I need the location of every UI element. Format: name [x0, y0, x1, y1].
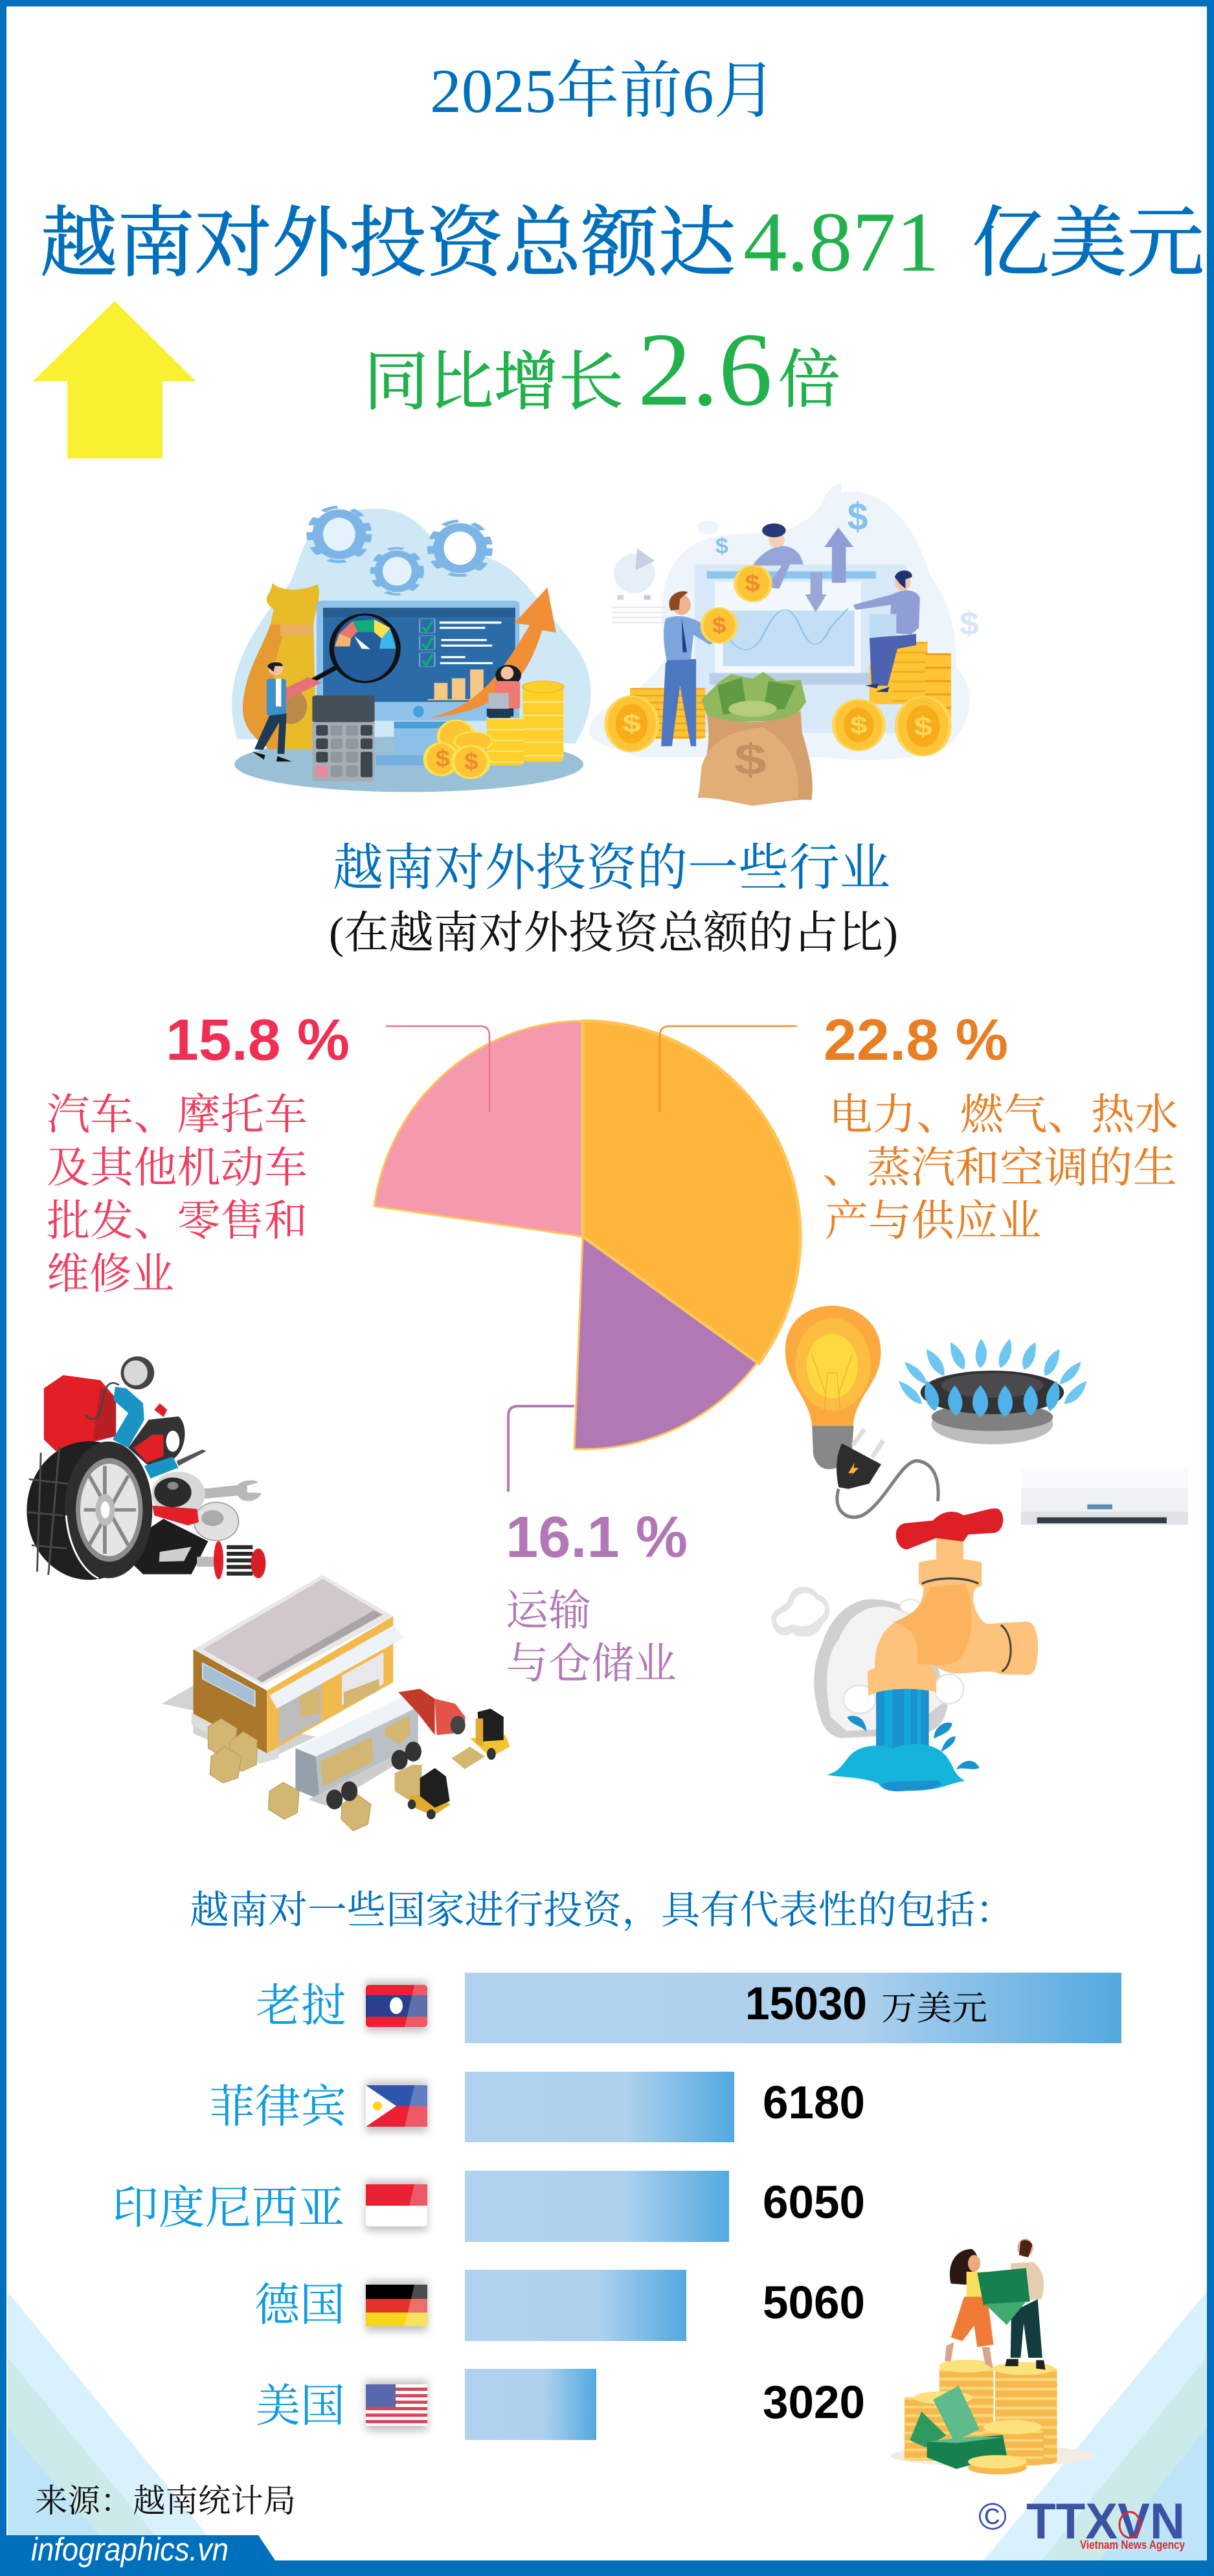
- callout line: 15.8%: [386, 1026, 489, 1112]
- shadow: [162, 1686, 316, 1763]
- value: 5060: [763, 2278, 865, 2329]
- bar: [465, 2171, 729, 2242]
- water stream: [827, 1685, 980, 1791]
- truck cab: [398, 1689, 466, 1735]
- person: left investor: $: [712, 613, 726, 638]
- description: [506, 1587, 677, 1688]
- monitor: [317, 601, 519, 765]
- bar chart: [112, 1973, 1121, 2440]
- tap handle: [896, 1508, 1003, 1549]
- description: [822, 1092, 1178, 1245]
- large coins: $: [914, 711, 932, 741]
- forklift front: [395, 1765, 451, 1819]
- wall base: [192, 1713, 278, 1764]
- battery: [132, 1519, 208, 1574]
- globe: [1119, 2512, 1140, 2538]
- value: 15030: [745, 1978, 867, 2030]
- person: man with magnifier: [253, 662, 292, 761]
- up and down arrows: [805, 528, 853, 612]
- large coins: $: [623, 709, 641, 737]
- title text blue: 越南对外投资总额达: [40, 201, 736, 286]
- decoration: bottom left light rays: [8, 2292, 208, 2535]
- small coins: [968, 2455, 1027, 2474]
- growth text: 同比增长: [364, 346, 624, 418]
- growth value 2.6: 2.6: [638, 312, 772, 428]
- copyright mark: ©: [978, 2496, 1007, 2538]
- country name: 印度尼西亚: [112, 2184, 344, 2234]
- gears: [309, 507, 489, 594]
- dollar signs: [715, 496, 979, 642]
- coin stacks: $: [436, 746, 450, 772]
- person: top investor: [736, 524, 804, 601]
- forklift right: [451, 1708, 510, 1769]
- title: total investment: [40, 194, 1204, 289]
- flag: Germany: [366, 2281, 427, 2331]
- green money held: [977, 2268, 1030, 2325]
- red caliper: [152, 1506, 199, 1525]
- bar: [465, 1973, 1121, 2043]
- checklist: [420, 619, 501, 667]
- description: 产与供应业: [825, 1198, 1041, 1245]
- steam clouds: [771, 1587, 963, 1738]
- row: Germany: [254, 2270, 865, 2341]
- person: man: [1005, 2239, 1046, 2369]
- description: 运输: [506, 1587, 591, 1635]
- left wall: [193, 1649, 267, 1753]
- brake disc: [152, 1472, 205, 1516]
- windows: [203, 1663, 255, 1707]
- gas burner: [899, 1339, 1086, 1444]
- ground shadow: [890, 2445, 1095, 2467]
- label: 22.8% utilities: [822, 1008, 1178, 1245]
- row: Indonesia: [112, 2171, 865, 2242]
- row: United States: [256, 2369, 865, 2440]
- label: 15.8% motor vehicles: [47, 1008, 350, 1298]
- coin stacks: [630, 642, 951, 739]
- slice: motor vehicles 15.8%: [374, 1021, 583, 1237]
- dollar signs: $: [715, 533, 728, 558]
- agency name: Vietnam News Agency: [1080, 2538, 1185, 2551]
- country name: 菲律宾: [209, 2083, 346, 2133]
- orange growth arrow: [428, 587, 556, 718]
- boxes left: [208, 1719, 371, 1831]
- growth unit: 倍: [778, 346, 840, 416]
- gauge: [121, 1356, 154, 1389]
- description: 及其他机动车: [47, 1145, 308, 1192]
- icon: yellow up arrow: [33, 301, 196, 458]
- banknotes: [910, 2386, 1007, 2469]
- footer tab: [0, 2535, 275, 2576]
- growth line: [364, 312, 840, 428]
- front wall: [267, 1616, 393, 1753]
- screen: [695, 565, 906, 733]
- background pie and lines: [612, 484, 842, 623]
- light bulb: [785, 1306, 881, 1469]
- money bag with banknotes: [698, 672, 813, 806]
- description: 维修业: [47, 1251, 174, 1298]
- wrench: [201, 1480, 262, 1501]
- country name: 美国: [256, 2382, 345, 2432]
- description: 与仓储业: [506, 1641, 677, 1688]
- description: 批发、零售和: [47, 1198, 308, 1245]
- country name: 德国: [254, 2281, 345, 2331]
- flag: United States: [366, 2380, 427, 2431]
- illustration: couple on coins: [890, 2239, 1095, 2474]
- person: top investor: $: [745, 570, 760, 596]
- value: 15.8 %: [166, 1008, 350, 1073]
- section heading: countries: 越南对一些国家进行投资，具有代表性的包括：: [190, 1889, 1015, 1932]
- flag: Philippines: [366, 2081, 427, 2132]
- slice: utilities 22.8%: [583, 1021, 800, 1363]
- illustration: analytics dashboard: [232, 507, 591, 792]
- money bag: [243, 583, 319, 749]
- person: right investor: [853, 570, 920, 692]
- small bars: [428, 669, 489, 700]
- shock absorber: [197, 1557, 219, 1567]
- illustration: warehouse and truck: [162, 1575, 510, 1831]
- motorcycle fender: [128, 1417, 185, 1466]
- country name: 老挝: [256, 1982, 346, 2032]
- flag: Indonesia: [366, 2180, 427, 2231]
- slice: transport 16.1%: [574, 1237, 758, 1449]
- person: woman: [945, 2249, 993, 2369]
- unit: 万美元: [881, 1991, 987, 2028]
- pie chart: [374, 1021, 800, 1449]
- wordmark: TTXVN: [1026, 2492, 1185, 2549]
- description: 、蒸汽和空调的生: [822, 1145, 1177, 1192]
- row: Philippines: [209, 2072, 865, 2142]
- bar: [465, 2270, 686, 2341]
- logo: TTXVN: [978, 2492, 1185, 2551]
- bearing: [194, 1502, 239, 1541]
- large coins: $: [850, 711, 868, 739]
- description: [47, 1092, 308, 1298]
- water tap: [868, 1538, 1038, 1696]
- money bag with banknotes: $: [734, 735, 767, 784]
- value: 3020: [763, 2377, 865, 2428]
- large coins: [606, 696, 950, 756]
- screwdriver: [144, 1457, 179, 1479]
- decoration: bottom right light rays: [984, 2292, 1206, 2560]
- trailer: [295, 1694, 422, 1809]
- coin stacks: [425, 681, 563, 778]
- coin stacks: [905, 2360, 1057, 2465]
- coin stacks: $: [464, 748, 478, 774]
- tire: [27, 1441, 152, 1580]
- blue pump tool: [113, 1387, 144, 1448]
- bar: [465, 2369, 596, 2440]
- illustration: investors and coins: [589, 484, 979, 806]
- plug and cable: [837, 1429, 938, 1518]
- description: 电力、燃气、热水: [829, 1092, 1178, 1139]
- source note: 来源：越南统计局: [35, 2483, 296, 2519]
- value: 6050: [763, 2177, 865, 2228]
- callout line: 22.8%: [660, 1026, 797, 1112]
- value: 6180: [763, 2078, 865, 2129]
- unit text: 亿美元: [972, 201, 1204, 286]
- label: 16.1% transport: [506, 1505, 688, 1688]
- section subheading: share note: (在越南对外投资总额的占比): [329, 908, 898, 958]
- person: left investor: [661, 591, 736, 746]
- roof: [193, 1575, 393, 1686]
- magnifier: [279, 614, 398, 697]
- person: woman with tablet: [482, 665, 521, 743]
- row: Laos: [256, 1973, 1121, 2043]
- awning: [269, 1625, 404, 1708]
- footer site name: infographics.vn: [31, 2531, 229, 2568]
- air conditioner: [1021, 1468, 1188, 1525]
- bar: [465, 2072, 734, 2142]
- value: 4.871: 4.871: [743, 194, 939, 289]
- value: 16.1 %: [506, 1505, 688, 1570]
- dollar signs: $: [848, 496, 868, 538]
- section heading: industries: 越南对外投资的一些行业: [333, 840, 890, 896]
- illustration: energy utilities: [771, 1306, 1188, 1791]
- jerry can: [44, 1375, 116, 1451]
- description: 汽车、摩托车: [47, 1092, 308, 1139]
- calculator: [312, 695, 375, 781]
- illustration: auto parts: [27, 1356, 265, 1580]
- title: period: 2025年前6月: [430, 56, 777, 126]
- value: 22.8 %: [824, 1008, 1008, 1073]
- callout line: 16.1%: [508, 1406, 574, 1492]
- text: $: [960, 605, 979, 642]
- flag: Laos: [366, 1981, 427, 2032]
